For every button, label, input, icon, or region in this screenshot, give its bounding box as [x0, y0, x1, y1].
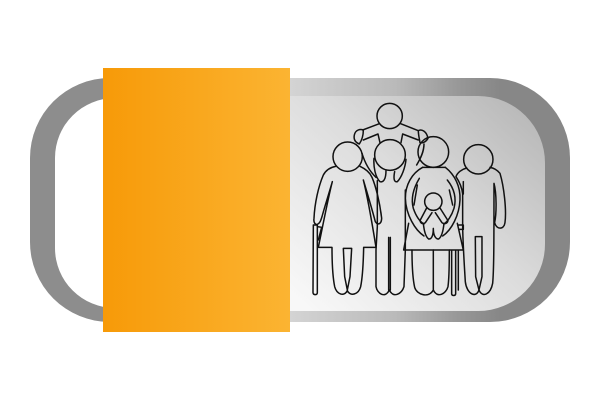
- second cane legs: [452, 251, 458, 295]
- figure: right man: [456, 145, 505, 294]
- cane: [313, 225, 317, 295]
- icon: family of figures: [313, 103, 505, 295]
- figure: right woman holding baby: [404, 137, 463, 295]
- orange panel: [103, 68, 290, 332]
- figure: child on shoulders: [354, 103, 428, 177]
- capsule inner white area: [55, 98, 295, 308]
- figure: central woman: [374, 140, 406, 295]
- capsule inner gray panel: [288, 96, 545, 311]
- capsule outer ring, left side: [30, 78, 295, 322]
- figure: baby: [420, 193, 448, 239]
- figure: grandmother with cane: [313, 142, 382, 295]
- capsule outer ring, right side: [288, 78, 570, 322]
